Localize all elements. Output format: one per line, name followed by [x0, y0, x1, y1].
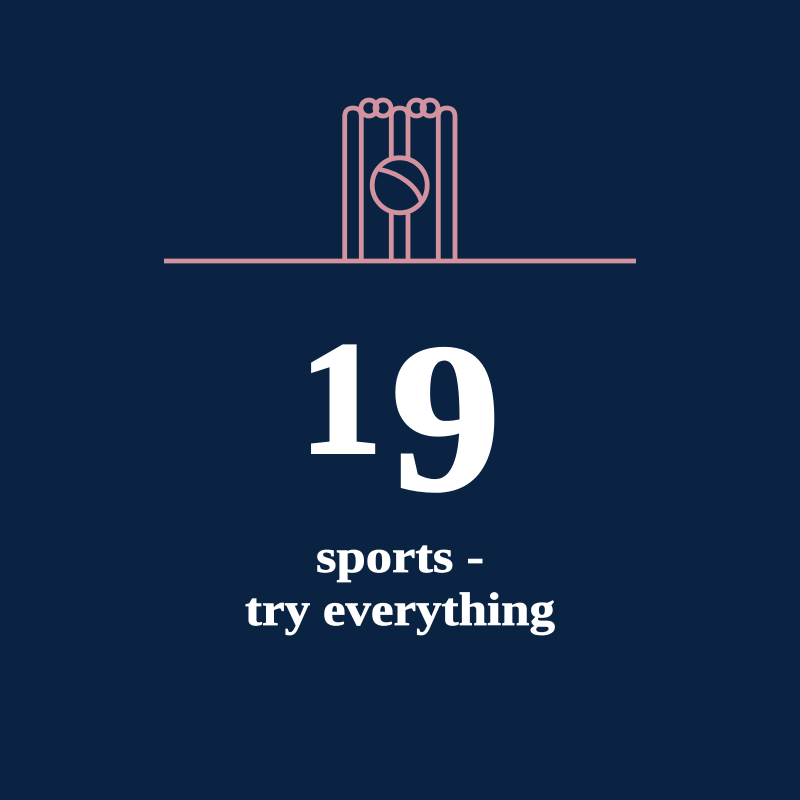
big number 19 — [300, 300, 501, 535]
ground line — [164, 259, 636, 263]
big number 19: 1 — [300, 309, 382, 487]
big number 19: 9 — [391, 300, 501, 535]
caption: try everything — [245, 584, 556, 636]
caption: sports - — [316, 531, 484, 583]
ball — [372, 158, 427, 213]
middle stump — [391, 108, 408, 261]
icon: cricket wicket hit by ball — [164, 100, 636, 261]
left stump — [345, 108, 361, 261]
caption — [245, 531, 556, 636]
bails — [361, 100, 438, 116]
right stump — [438, 108, 455, 261]
